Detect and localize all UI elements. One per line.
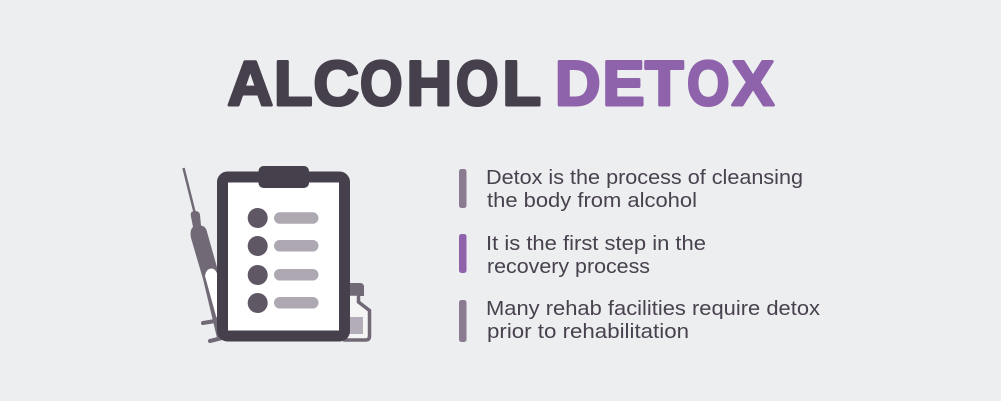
bullet text 1: the body from alcohol <box>487 189 697 212</box>
bullet bar 2 <box>459 234 466 273</box>
icon: vial <box>345 283 370 340</box>
bullet text 3: Many rehab facilities require detox <box>486 297 821 320</box>
icon: clipboard board <box>222 177 344 336</box>
title word: ALCOHOL: O <box>456 49 498 119</box>
title word: ALCOHOL: ALC <box>228 49 359 119</box>
bullet bar 1 <box>459 169 466 208</box>
bullet text 2: It is the first step in the <box>486 232 706 255</box>
checklist row 4 <box>248 293 318 313</box>
bullet text 2: recovery process <box>487 255 650 278</box>
icon: syringe <box>184 168 222 341</box>
title word: DETOX: O <box>687 49 730 119</box>
checklist row 3 <box>248 265 318 285</box>
title word: DETOX <box>555 49 774 119</box>
bullet 3 <box>459 297 826 343</box>
icon: syringe, clipboard and vial <box>184 166 370 341</box>
bullet 2 <box>459 232 712 278</box>
bullet bar 3 <box>459 300 466 342</box>
title word: ALCOHOL <box>228 49 541 119</box>
title word: ALCOHOL: H <box>407 49 452 119</box>
bullet list <box>459 166 826 343</box>
title <box>228 49 774 119</box>
title word: ALCOHOL: O <box>360 49 402 119</box>
checklist row 1 <box>248 208 318 228</box>
bullet 1 <box>459 166 809 212</box>
checklist row 2 <box>248 236 318 256</box>
bullet text 1: Detox is the process of cleansing <box>486 166 803 189</box>
title word: DETOX: DET <box>555 49 683 119</box>
icon: clipboard clip <box>258 166 309 188</box>
title word: DETOX: X <box>732 49 774 119</box>
title word: ALCOHOL: L <box>502 49 541 119</box>
bullet text 3: prior to rehabilitation <box>487 320 689 343</box>
